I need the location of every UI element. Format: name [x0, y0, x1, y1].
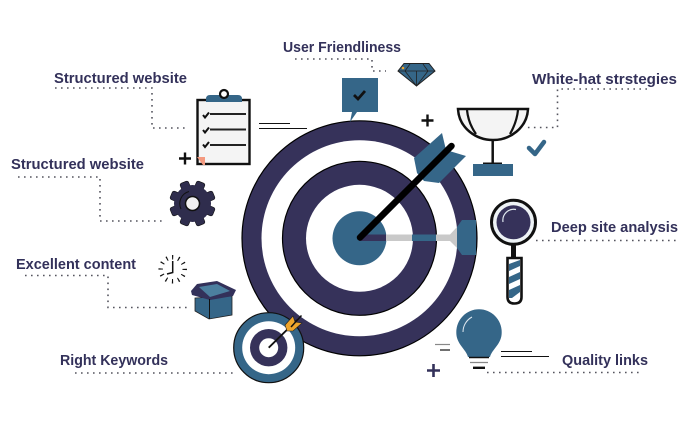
- icon: plus right: [422, 114, 434, 126]
- label: Structured website top: Structured website: [54, 71, 187, 87]
- icon: plus bottom: [427, 364, 440, 377]
- icon: plus left: [179, 152, 191, 164]
- label: Excellent content: Excellent content: [16, 257, 136, 273]
- decorative line by bulb left: [435, 344, 450, 346]
- icon: light bulb: [456, 309, 502, 368]
- icon: clock: [160, 257, 185, 282]
- label: Structured website top: [54, 71, 187, 128]
- title: User Friendliness: User Friendliness: [283, 40, 401, 56]
- icon: speech bubble with check: [342, 78, 378, 122]
- label: Deep site analysis: Deep site analysis: [551, 220, 678, 236]
- short line by bulb left: [440, 349, 450, 351]
- main dart: [360, 133, 466, 238]
- label: White-hat strstegies: White-hat strstegies: [532, 72, 677, 88]
- label: Excellent content: [16, 257, 187, 308]
- label: Quality links: Quality links: [562, 353, 648, 369]
- icon: blue check: [529, 142, 544, 154]
- big target: [242, 121, 477, 356]
- icon: trophy: [458, 109, 528, 176]
- icon: gear: [170, 181, 215, 226]
- decorative lines by clipboard: [259, 124, 307, 128]
- label: Right Keywords: Right Keywords: [60, 353, 168, 369]
- horizontal dart: [359, 220, 476, 255]
- small target: [234, 313, 304, 383]
- icon: open box: [191, 281, 236, 319]
- label: White-hat strstegies: [525, 72, 677, 128]
- icon: magnifier: [492, 200, 536, 304]
- icon: clipboard: [197, 90, 250, 165]
- label: Structured website lower: [11, 157, 166, 221]
- label: Structured website lower: Structured website: [11, 157, 144, 173]
- title: User Friendliness: [283, 40, 401, 71]
- icon: diamond: [398, 64, 435, 86]
- decorative lines by bulb right: [501, 352, 549, 356]
